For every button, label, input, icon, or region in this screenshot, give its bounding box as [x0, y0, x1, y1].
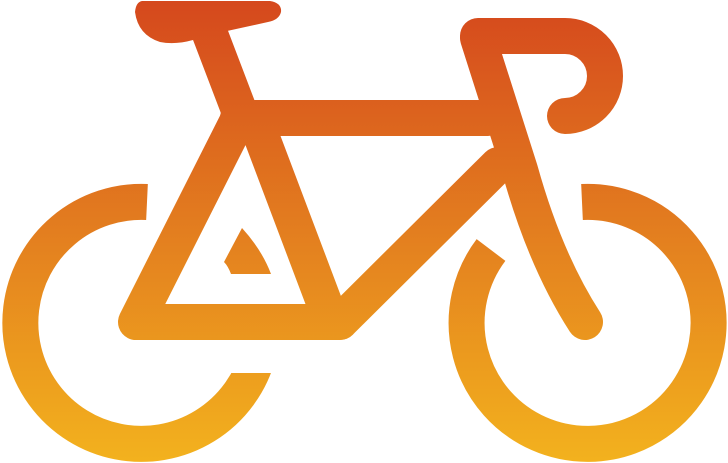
top tube: [238, 100, 488, 136]
right wheel: [467, 202, 709, 444]
seat stay and chain stay: [136, 120, 340, 322]
fork and head tube: [478, 38, 585, 322]
left wheel: [20, 202, 258, 444]
seat post: [210, 34, 242, 118]
chainring: [224, 228, 271, 274]
frame: [136, 34, 605, 322]
saddle: [135, 1, 281, 43]
seat tube: [256, 122, 330, 318]
down tube: [340, 165, 498, 322]
handlebar: [478, 36, 605, 116]
